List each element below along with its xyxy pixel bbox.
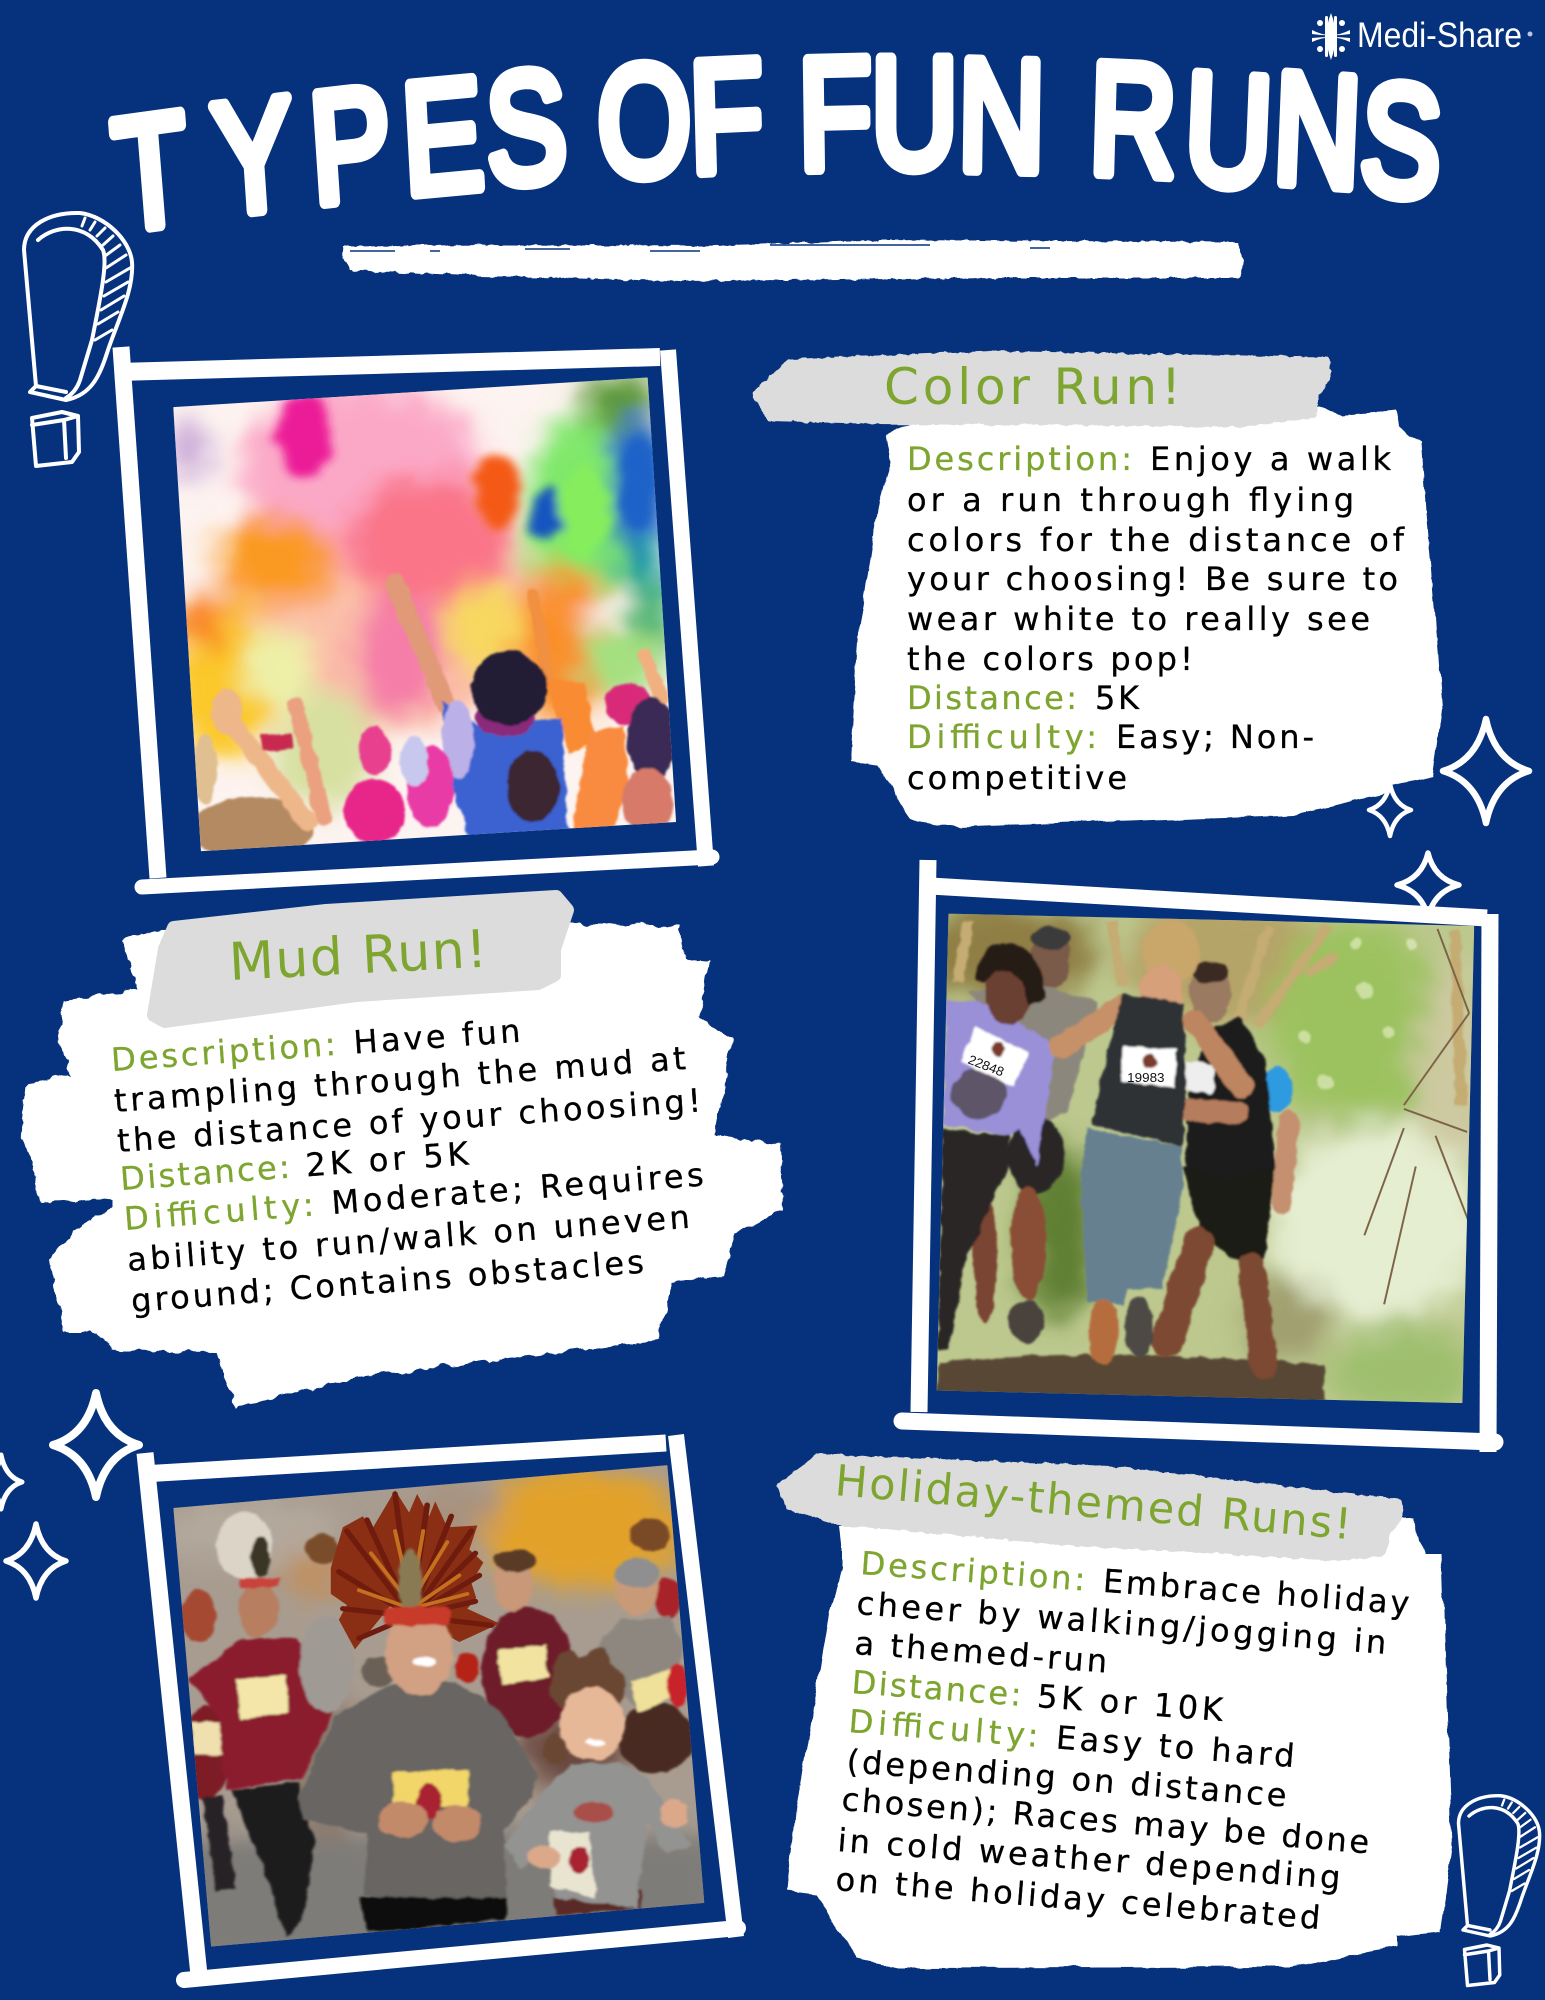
panel: mud run: the distance of your choosing!: [116, 1081, 702, 1160]
photo: holiday runners with feather headdress: [173, 1465, 704, 1946]
title: TYPES OF FUN RUNS: [107, 24, 1446, 264]
panel: mud run: 2K or 5K: [304, 1134, 471, 1184]
panel: color run: Color Run!: [884, 358, 1181, 416]
panel: holiday-themed runs: Distance:: [850, 1663, 1023, 1714]
title underline brush stroke: [342, 240, 1244, 281]
panel: color run: Easy; Non-: [1116, 718, 1314, 756]
panel: color run: wear white to really see: [907, 600, 1370, 638]
panel: color run: Enjoy a walk: [1150, 440, 1391, 478]
panel: holiday-themed runs: (depending on distance: [845, 1742, 1288, 1815]
panel: color run: competitive: [907, 759, 1127, 797]
panel: color run: colors for the distance of: [907, 521, 1405, 559]
panel: holiday-themed runs: Easy to hard: [1055, 1718, 1296, 1775]
icon: sparkles left of holiday photo: [0, 1393, 139, 1598]
logo: Medi-Share: Medi-Share: [1357, 16, 1522, 55]
panel: mud run: Moderate; Requires: [330, 1156, 705, 1222]
panel: holiday-themed runs: Embrace holiday: [1102, 1562, 1411, 1622]
panel: holiday-themed runs: a themed-run: [853, 1624, 1109, 1681]
panel: color run: your choosing! Be sure to: [907, 560, 1398, 598]
icon: exclamation mark bottom right: [1458, 1796, 1540, 1986]
panel: color run: Difficulty:: [907, 718, 1097, 756]
panel: color run: or a run through flying: [907, 481, 1354, 519]
panel: mud run: [20, 897, 783, 1408]
panel: mud run: trampling through the mud at: [113, 1039, 687, 1120]
panel: holiday-themed runs: Holiday-themed Runs!: [833, 1456, 1353, 1550]
panel: mud run: Mud Run!: [228, 920, 488, 993]
photo: mud run runners: [936, 914, 1474, 1404]
photo frame 2: mud run: [902, 860, 1495, 1452]
panel: color run: Description:: [907, 440, 1132, 478]
panel: holiday-themed runs: 5K or 10K: [1036, 1677, 1225, 1729]
photo frame 3: holiday run: [142, 1435, 738, 1980]
logo: Medi-Share: [1312, 13, 1532, 60]
panel: mud run: ability to run/walk on uneven: [126, 1198, 691, 1279]
panel: mud run: ground; Contains obstacles: [130, 1243, 645, 1320]
panel: mud run: Difficulty:: [123, 1186, 315, 1238]
panel: color run: 5K: [1095, 679, 1140, 717]
white frame 1: [118, 347, 712, 887]
photo: mud run runners: 22848: [966, 1052, 1006, 1079]
panel: holiday-themed runs: in cold weather depending: [836, 1821, 1342, 1897]
panel: holiday-themed runs: Description:: [859, 1544, 1087, 1598]
panel: holiday-themed runs: Difficulty:: [847, 1702, 1040, 1755]
white frame 2: [902, 860, 1495, 1452]
panel: holiday-themed runs: chosen); Races may be done: [840, 1780, 1371, 1861]
photo: color run crowd: [173, 378, 676, 852]
panel: holiday-themed runs: [781, 1456, 1452, 1968]
panel: color run: Distance:: [907, 679, 1077, 717]
white frame 3: [142, 1435, 738, 1980]
panel: mud run: Description:: [110, 1025, 337, 1079]
panel: mud run: Distance:: [119, 1148, 291, 1198]
icon: exclamation mark top left: [24, 213, 132, 466]
panel: holiday-themed runs: on the holiday celebrated: [834, 1860, 1322, 1937]
panel: holiday-themed runs: cheer by walking/jogging in: [855, 1584, 1388, 1662]
photo: mud run runners: 19983: [1127, 1070, 1165, 1085]
panel: color run: the colors pop!: [907, 640, 1193, 678]
photo frame 1: color run: [118, 347, 712, 887]
panel: color run: [756, 355, 1442, 827]
panel: mud run: Have fun: [352, 1012, 522, 1062]
icon: sparkles right of color run: [1369, 719, 1529, 917]
